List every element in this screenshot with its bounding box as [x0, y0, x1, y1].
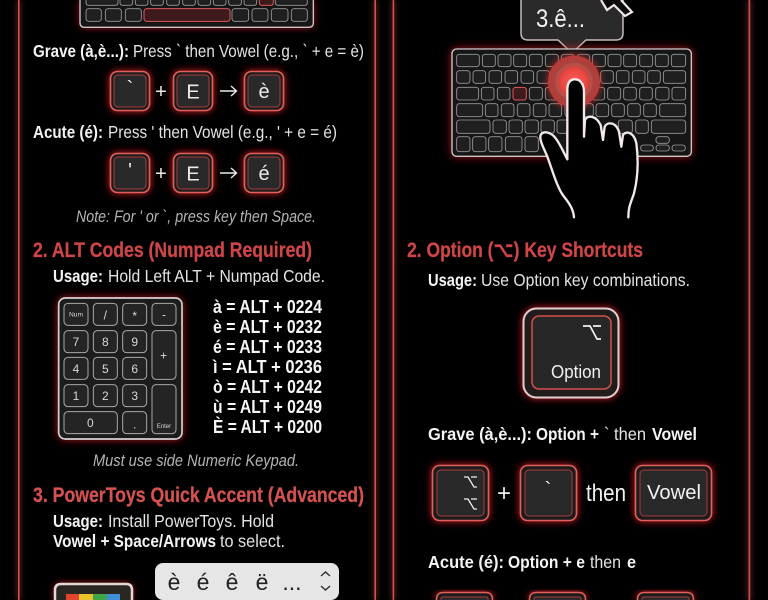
- list: ALT codes: ù = ALT + 0249: [213, 396, 322, 417]
- key sequence: grave: `: [127, 78, 133, 100]
- icon: numeric keypad: /: [104, 308, 108, 322]
- heading: ALT codes: 2. ALT Codes (Numpad Required): [33, 238, 312, 262]
- icon: Option key: Option: [551, 362, 601, 382]
- icon: numeric keypad: 5: [102, 362, 109, 376]
- text: Option grave instruction: Grave (à,è...):: [428, 424, 532, 444]
- icon: numeric keypad: 1: [73, 389, 80, 403]
- heading: PowerToys: 3. PowerToys Quick Accent (Advanced): [33, 483, 364, 507]
- note: numeric keypad: Must use side Numeric Keypad.: [93, 452, 299, 470]
- popup: accent picker: [155, 563, 339, 600]
- text: Option usage: Usage:: [428, 270, 477, 290]
- popup: accent picker: ë: [256, 569, 268, 595]
- key sequence: acute: é: [258, 163, 270, 185]
- text: Option acute instruction: Acute (é):: [428, 552, 504, 572]
- list: ALT codes: ì = ALT + 0236: [212, 356, 322, 377]
- list: ALT codes: ò = ALT + 0242: [213, 376, 322, 397]
- icon: numeric keypad: 3: [131, 389, 138, 403]
- icon: numeric keypad: Enter: [157, 424, 171, 430]
- key sequence: acute: ': [128, 160, 132, 182]
- popup: accent picker: ...: [282, 569, 302, 595]
- icon: keyboard with press highlight: [452, 49, 691, 217]
- text: acute instruction: Acute (é):: [33, 122, 103, 142]
- icon: numeric keypad: +: [160, 348, 167, 362]
- callout: accent menu bubble: 3.ê...: [536, 5, 585, 33]
- text: grave instruction: Grave (à,è...):: [33, 41, 129, 61]
- text: ALT usage: Usage:: [53, 266, 103, 286]
- text: Option grave instruction: Vowel: [652, 424, 697, 444]
- icon: numeric keypad: 7: [73, 335, 80, 349]
- key sequence: acute: +: [155, 163, 167, 185]
- text: Option acute instruction: then: [590, 552, 621, 572]
- text: PowerToys usage: [53, 511, 285, 551]
- icon: numeric keypad: Num: [69, 312, 83, 319]
- key sequence: Option grave: then: [586, 480, 626, 507]
- key sequence: acute: [110, 154, 284, 192]
- key sequence: Option grave: +: [497, 480, 511, 507]
- key sequence: grave: E: [186, 82, 200, 104]
- icon: numeric keypad: 4: [73, 362, 80, 376]
- text: PowerToys usage: Install PowerToys. Hold: [108, 511, 274, 531]
- icon: numeric keypad: *: [132, 309, 137, 323]
- key sequence: Option acute: [436, 592, 694, 600]
- heading: Option key shortcuts: 2. Option (⌥) Key Shortcuts: [407, 238, 643, 262]
- text: PowerToys usage: Vowel + Space/Arrows: [53, 531, 216, 551]
- key sequence: Option grave: `: [545, 479, 551, 501]
- key sequence: grave: +: [155, 81, 167, 103]
- icon: numeric keypad: 6: [131, 362, 138, 376]
- text: Option grave instruction: ` then: [604, 424, 646, 444]
- text: Option acute instruction: Option + e: [508, 552, 585, 572]
- icon: numeric keypad: 9: [131, 335, 138, 349]
- key sequence: acute: E: [186, 164, 200, 186]
- icon: numeric keypad: -: [162, 308, 166, 322]
- icon: numeric keypad: 0: [87, 416, 94, 430]
- list: ALT codes: è = ALT + 0232: [213, 316, 322, 337]
- icon: PowerToys logo: [55, 584, 132, 600]
- popup: accent picker: è: [168, 569, 180, 595]
- text: PowerToys usage: Usage:: [53, 511, 103, 531]
- text: acute instruction: Press ' then Vowel (e.g., ' + e = é): [108, 122, 337, 142]
- icon: numeric keypad: [59, 298, 182, 439]
- list: ALT codes: à = ALT + 0224: [213, 296, 323, 317]
- icon: Option key: [524, 308, 618, 398]
- text: Option grave instruction: [428, 424, 697, 444]
- icon: numeric keypad: .: [133, 417, 136, 431]
- text: Option acute instruction: e: [627, 552, 636, 572]
- note: dead key space: Note: For ' or `, press key then Space.: [76, 208, 316, 226]
- popup: accent picker: é: [197, 569, 209, 595]
- key sequence: grave: [110, 72, 284, 110]
- text: Option grave instruction: Option +: [536, 424, 599, 444]
- key sequence: Option grave: [432, 466, 712, 520]
- text: Option acute instruction: [428, 552, 636, 572]
- popup: accent picker: ê: [226, 569, 238, 595]
- callout: accent menu bubble: [521, 0, 623, 53]
- panel: right column border: [393, 0, 750, 600]
- icon: numeric keypad: 8: [102, 335, 109, 349]
- key sequence: Option grave: Vowel: [647, 482, 701, 504]
- text: Option usage: Use Option key combinations.: [481, 270, 690, 290]
- text: ALT usage: Hold Left ALT + Numpad Code.: [108, 266, 325, 286]
- key sequence: grave: è: [258, 81, 270, 103]
- icon: mouse cursor: [601, 0, 632, 16]
- text: PowerToys usage: to select.: [220, 531, 285, 551]
- text: grave instruction: [33, 41, 364, 61]
- list: ALT codes: é = ALT + 0233: [213, 336, 322, 357]
- text: grave instruction: Press ` then Vowel (e.g., ` + e = è): [133, 41, 364, 61]
- panel: left column border: [18, 0, 376, 600]
- icon: numeric keypad: 2: [102, 389, 109, 403]
- icon: cropped keyboard, left column: [80, 0, 313, 27]
- list: ALT codes: È = ALT + 0200: [213, 416, 322, 437]
- list: ALT codes: [212, 296, 323, 437]
- text: acute instruction: [33, 122, 337, 142]
